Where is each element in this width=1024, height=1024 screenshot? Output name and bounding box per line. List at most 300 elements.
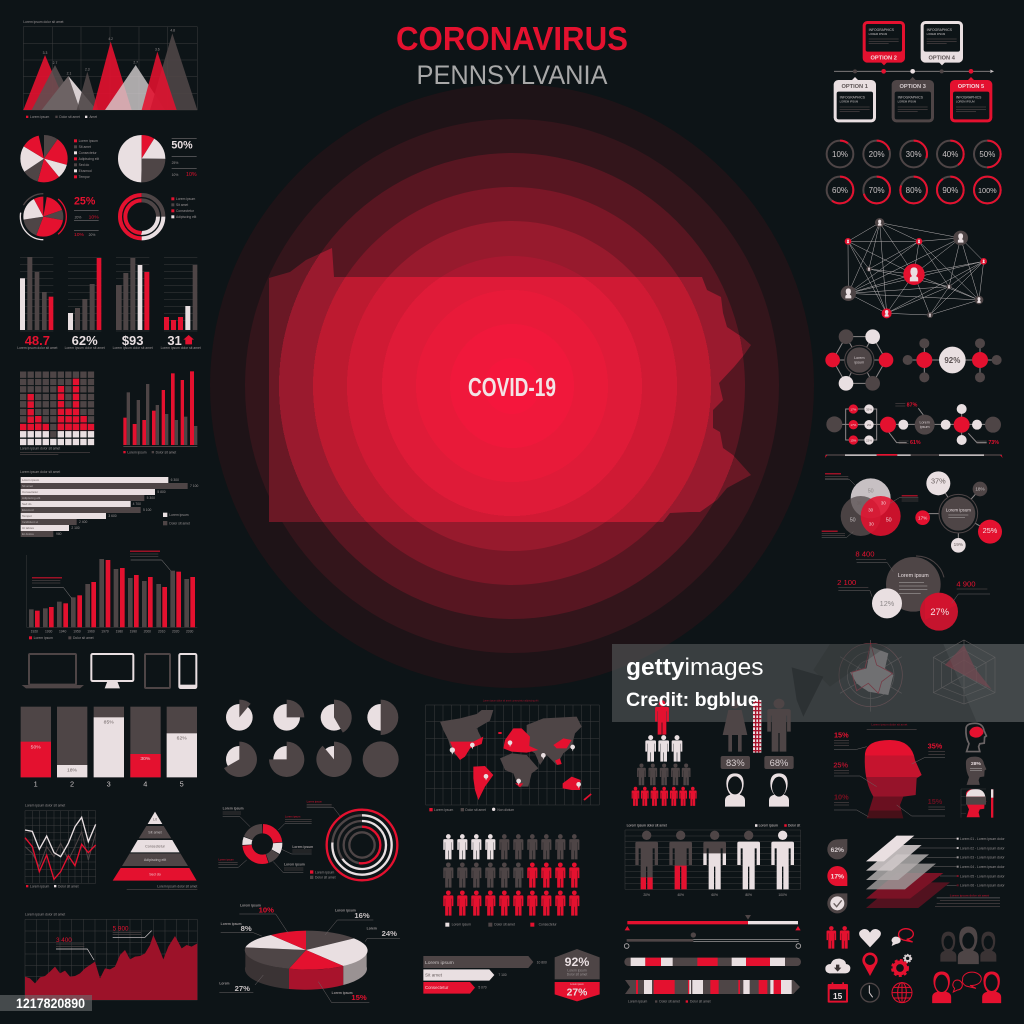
pie 1 legend: Sit amet bbox=[79, 145, 91, 149]
grouped column chart: Lorem ipsum bbox=[127, 450, 147, 454]
percentage rings bbox=[827, 141, 1001, 203]
triangle chart: 2.7 bbox=[133, 61, 138, 65]
percentage rings: 40% bbox=[942, 150, 958, 159]
hexagon badge 92%: Lorem ipsum bbox=[570, 983, 584, 986]
radar chart 1 bbox=[839, 640, 902, 712]
bubble hub chart bbox=[915, 471, 1002, 553]
triangle chart: Lorem ipsum dolor sit amet bbox=[23, 20, 64, 24]
percentage rings: 30% bbox=[906, 150, 922, 159]
3D pie chart: 16% bbox=[354, 911, 370, 920]
icon: chat bubbles bbox=[892, 929, 913, 946]
bubble hub chart: 37% bbox=[931, 477, 946, 486]
head profile chart: 15% bbox=[834, 731, 849, 740]
horizontal bar chart: Dolor sit amet bbox=[169, 521, 190, 525]
ring legend bbox=[171, 197, 196, 219]
Venn diagram bbox=[822, 473, 918, 537]
horizontal bar chart: 2 100 bbox=[71, 526, 80, 530]
option 3 card: OPTION 3 bbox=[899, 84, 926, 90]
process tree: ipsum bbox=[920, 425, 930, 429]
concentric progress chart: Lorem ipsum bbox=[307, 799, 323, 803]
paired column chart: 2020 bbox=[172, 629, 180, 633]
arrow bars bbox=[423, 956, 547, 994]
donut chart with callouts: Lorem ipsum bbox=[223, 807, 244, 811]
donut chart with callouts: Lorem ipsum bbox=[284, 863, 305, 867]
network diagram bbox=[841, 218, 987, 318]
rounded segmented bar bbox=[624, 958, 801, 966]
small pie grid bbox=[224, 700, 399, 777]
right column upper elements bbox=[827, 21, 1001, 318]
head profile chart: 15% bbox=[928, 797, 943, 806]
Venn diagram: 30 bbox=[857, 501, 862, 506]
heat grid: Lorem ipsum dolor sit amet bbox=[20, 447, 60, 451]
triangle chart: 3.3 bbox=[43, 51, 47, 55]
process tree: 15% bbox=[850, 438, 857, 442]
option timeline bbox=[834, 69, 994, 74]
figure percentage chart: Lorem ipsum bbox=[759, 823, 778, 827]
bar set 31 up: Lorem ipsum dolor sit amet bbox=[161, 346, 201, 350]
3D pie chart bbox=[219, 904, 400, 1003]
option 2 card: LOREM IPSUM bbox=[869, 32, 887, 36]
paired column chart: 2000 bbox=[144, 629, 151, 633]
horizontal bar chart: 4 700 bbox=[133, 502, 141, 506]
triangle chart: Lorem ipsum bbox=[30, 115, 49, 119]
triangle chart: 2.7 bbox=[53, 61, 57, 65]
process tree: 17% bbox=[850, 407, 857, 411]
bubble hub chart: 19% bbox=[954, 542, 963, 547]
concentric progress chart: Dolor sit amet bbox=[315, 876, 336, 880]
icon: conversation bbox=[932, 971, 1001, 1003]
head profile chart: Lorem ipsum dolor sit amet bbox=[871, 722, 907, 726]
stacked percentage columns: 30% bbox=[140, 756, 151, 762]
donut chart with callouts: Lorem ipsum bbox=[285, 814, 301, 818]
stat 50%: 50% bbox=[171, 140, 193, 152]
world map: Lorem ipsum dolor sit amet consectetur adipiscing elit bbox=[483, 700, 539, 703]
bubble hub chart: 17% bbox=[918, 515, 927, 520]
stat 25%: 20% bbox=[89, 233, 95, 237]
stacked percentage columns: 62% bbox=[177, 736, 187, 742]
Venn diagram: 30 bbox=[881, 501, 886, 506]
left column upper charts bbox=[17, 20, 201, 350]
paired column chart: 1960 bbox=[87, 629, 95, 633]
pyramid chart: Adipiscing elit bbox=[144, 858, 166, 862]
figure percentage chart: Lorem ipsum dolor sit amet bbox=[627, 823, 667, 827]
overlapping bubble chart: 4 900 bbox=[956, 580, 976, 589]
pie 1 legend: Consectetur bbox=[79, 151, 98, 155]
exploded pie chart bbox=[20, 194, 66, 240]
stacked percentage columns: 3 bbox=[107, 779, 111, 788]
drop badges: 62% bbox=[831, 847, 844, 854]
stacked percentage columns: 18% bbox=[67, 767, 78, 773]
grey slider bbox=[624, 932, 801, 948]
bar set 62%: Lorem ipsum dolor sit amet bbox=[65, 346, 105, 350]
bar set 31 up bbox=[161, 257, 201, 350]
option 1 card bbox=[834, 77, 876, 122]
figure percentage chart: 20% bbox=[643, 893, 650, 897]
paired column chart: Dolor sit amet bbox=[73, 636, 94, 640]
icon: location pin bbox=[862, 953, 878, 976]
3D pie chart: 24% bbox=[382, 929, 397, 938]
stat 50%: 10% bbox=[172, 173, 178, 177]
triangle chart: 2.3 bbox=[85, 68, 90, 72]
area chart: Lorem ipsum dolor sit amet bbox=[25, 913, 65, 917]
icon: laptop bbox=[22, 654, 84, 688]
paired column chart: Lorem ipsum bbox=[34, 636, 53, 640]
horizontal bar chart: 980 bbox=[56, 532, 62, 536]
donut chart with callouts: Lorem ipsum bbox=[292, 845, 313, 849]
grouped column chart bbox=[123, 371, 197, 454]
area chart: 3 400 bbox=[56, 937, 72, 944]
gender comparison: 83% bbox=[726, 758, 745, 768]
concentric outbreak rings bbox=[210, 84, 814, 688]
icon: head with percentage: 28% bbox=[971, 761, 982, 767]
stacked layers diagram bbox=[866, 836, 1005, 908]
stat 25% bbox=[74, 196, 99, 238]
concentric progress chart bbox=[307, 799, 397, 880]
bar set 62% bbox=[65, 257, 105, 350]
ring legend: Lorem ipsum bbox=[176, 197, 195, 201]
option 3 card bbox=[892, 77, 934, 122]
hexagon badge 92%: Lorem ipsum bbox=[567, 968, 587, 972]
arrow bars: 5 070 bbox=[478, 986, 487, 990]
percentage rings: 70% bbox=[869, 186, 885, 195]
area chart: 5 900 bbox=[113, 925, 129, 932]
3D pie chart: 15% bbox=[351, 993, 367, 1002]
horizontal bar chart: Tempor bbox=[22, 514, 32, 518]
stacked layers diagram: Lorem 05 - Lorem ipsum dolor bbox=[960, 874, 1005, 878]
option 4 card: INFOGRAPHICS bbox=[927, 28, 953, 32]
map of Pennsylvania bbox=[269, 248, 751, 522]
horizontal bar chart: Eiusmod bbox=[22, 508, 34, 512]
stacked layers diagram: Lorem 06 - Lorem ipsum dolor bbox=[960, 884, 1005, 888]
option 1 card: LOREM IPSUM bbox=[840, 100, 858, 104]
paired column chart bbox=[27, 551, 197, 640]
triangle chart: 4.2 bbox=[108, 37, 113, 41]
horizontal bar chart: 3 600 bbox=[108, 514, 117, 518]
pyramid chart: Lorem ipsum dolor sit amet bbox=[157, 884, 197, 888]
horizontal bar chart: 7 100 bbox=[190, 484, 198, 488]
line chart: Lorem ipsum bbox=[30, 884, 49, 888]
arrow bars: Lorem ipsum bbox=[425, 960, 454, 966]
people pictogram: Dolor sit amet bbox=[494, 923, 515, 927]
figure percentage chart bbox=[625, 823, 801, 897]
option 5 card: LOREM IPSUM bbox=[956, 100, 975, 104]
double ring chart bbox=[120, 195, 163, 238]
Venn diagram: 50 bbox=[868, 489, 874, 495]
paired column chart: 2030 bbox=[186, 629, 194, 633]
paired column chart: 1920 bbox=[31, 629, 38, 633]
paired column chart: 2010 bbox=[158, 629, 166, 633]
right column middle elements bbox=[822, 329, 1003, 631]
pie chart 2 bbox=[130, 147, 153, 170]
pie 1 legend: Sed do bbox=[79, 163, 89, 167]
watermark credit text: Credit: bgblue bbox=[626, 689, 759, 711]
percentage rings: 80% bbox=[906, 186, 922, 195]
horizontal bar chart: 2 400 bbox=[79, 520, 87, 524]
overlapping bubble chart: Lorem ipsum bbox=[898, 573, 929, 579]
figure percentage chart: 60% bbox=[711, 893, 718, 897]
overlapping bubble chart: 12% bbox=[880, 599, 895, 608]
process tree: 2% bbox=[867, 423, 871, 427]
hexagon badge 92%: 27% bbox=[567, 987, 587, 998]
red slider bbox=[625, 915, 801, 930]
bar set $93 bbox=[113, 257, 153, 350]
3D pie chart: 10% bbox=[259, 906, 274, 915]
lower right section bbox=[612, 640, 1024, 828]
COVID-19 label: COVID-19 bbox=[468, 372, 556, 402]
icon: head thermometer bbox=[961, 789, 993, 818]
option 2 card bbox=[863, 21, 905, 65]
horizontal bar chart: Consectetur bbox=[22, 490, 38, 494]
icon: clock bbox=[861, 983, 879, 1002]
arrow bars: 7 100 bbox=[498, 973, 507, 977]
line chart: Lorem ipsum dolor sit amet bbox=[25, 804, 65, 808]
option 1 card: INFOGRAPHICS bbox=[840, 96, 866, 100]
stacked layers diagram: Lorem 02 - Lorem ipsum dolor bbox=[960, 846, 1005, 850]
process tree: 22% bbox=[866, 438, 872, 442]
figure percentage chart: 80% bbox=[745, 893, 752, 897]
option 4 card: OPTION 4 bbox=[928, 56, 956, 62]
stat 25%: 20% bbox=[75, 215, 81, 219]
icon: tablet bbox=[145, 654, 170, 688]
stacked percentage columns bbox=[21, 707, 197, 788]
triangle chart: 4.8 bbox=[170, 29, 175, 33]
drop badges: 17% bbox=[831, 873, 844, 880]
triangle chart bbox=[23, 20, 197, 119]
paired column chart: 1990 bbox=[130, 629, 137, 633]
figure percentage chart: Dolor sit bbox=[788, 823, 800, 827]
image id strip: 1217820890 bbox=[16, 995, 85, 1011]
people pyramid: Dolor sit bbox=[788, 823, 800, 827]
donut chart with callouts: Lorem ipsum bbox=[218, 857, 234, 861]
icon: globe bbox=[892, 983, 912, 1003]
stacked percentage columns: 85% bbox=[104, 719, 114, 725]
percentage rings: 20% bbox=[869, 150, 885, 159]
people pyramid: Lorem ipsum bbox=[759, 823, 778, 827]
option 2 card: OPTION 2 bbox=[870, 56, 897, 62]
world map: Dolor sit amet bbox=[465, 808, 486, 812]
pie 1 legend: Adipiscing elit bbox=[79, 157, 99, 161]
pie 1 legend: Tempor bbox=[79, 175, 91, 179]
option 3 card: LOREM IPSUM bbox=[898, 100, 916, 104]
overlapping bubble chart: 2 100 bbox=[837, 578, 856, 587]
icon: monitor bbox=[91, 654, 133, 688]
stacked percentage columns: 5 bbox=[180, 779, 184, 788]
overlapping bubble chart: 27% bbox=[930, 607, 949, 617]
option 3 card: INFOGRAPHICS bbox=[898, 96, 924, 100]
pie 1 legend bbox=[74, 139, 99, 179]
process tree: 17% bbox=[850, 423, 857, 427]
option 1 card: OPTION 1 bbox=[841, 84, 868, 90]
people pictogram: Consectetur bbox=[539, 923, 557, 927]
horizontal bar chart: Lorem ipsum bbox=[169, 513, 189, 517]
triangle chart: Dolor sit amet bbox=[59, 115, 80, 119]
percentage rings: 90% bbox=[942, 186, 958, 195]
pyramid chart bbox=[113, 812, 197, 890]
arrow bars: Consectetur bbox=[425, 985, 449, 990]
head profile chart bbox=[833, 722, 945, 818]
stat 25%: 10% bbox=[89, 214, 99, 220]
paired column chart: 1950 bbox=[73, 629, 81, 633]
ring legend: Sit amet bbox=[176, 203, 188, 207]
figure percentage chart: 40% bbox=[677, 893, 684, 897]
icon: calendar bbox=[828, 982, 848, 1003]
donut chart with callouts bbox=[218, 807, 313, 873]
area chart bbox=[25, 913, 197, 1000]
pyramid chart: Sed do bbox=[149, 872, 161, 876]
grouped column chart: Dolor sit amet bbox=[156, 450, 176, 454]
bottom center charts bbox=[218, 700, 600, 1003]
world map: Lorem ipsum bbox=[434, 808, 453, 812]
3D pie chart: Lorem bbox=[367, 927, 377, 931]
Getty Images watermark band bbox=[612, 644, 1024, 722]
Venn diagram: 30 bbox=[869, 522, 874, 527]
head profile chart: 25% bbox=[833, 760, 848, 769]
option 5 card bbox=[950, 77, 992, 122]
stacked percentage columns: 2 bbox=[70, 779, 74, 788]
pyramid chart: Lit bbox=[153, 817, 157, 821]
lower right charts and icons bbox=[624, 823, 1005, 1003]
overlapping bubble chart bbox=[837, 550, 990, 631]
people pictogram bbox=[443, 834, 579, 927]
watermark logo text: gettyimages bbox=[626, 654, 764, 681]
overlapping bubble chart: 8 400 bbox=[855, 550, 875, 559]
bubble hub chart: Lorem ipsum bbox=[946, 507, 971, 512]
option 4 card bbox=[921, 21, 963, 65]
triangle chart: 2.1 bbox=[67, 72, 71, 76]
triangle chart: 3.6 bbox=[155, 47, 160, 51]
process tree: 73% bbox=[988, 440, 999, 446]
bubble hub chart: 25% bbox=[983, 526, 998, 535]
icon: calendar: 15 bbox=[833, 991, 843, 1001]
horizontal bar chart: Lorem ipsum dolor sit amet bbox=[20, 470, 60, 474]
paired column chart: 1980 bbox=[116, 629, 123, 633]
left column lower charts bbox=[21, 707, 197, 1000]
gender comparison: 68% bbox=[770, 758, 788, 768]
hexagon badge 92%: 92% bbox=[565, 955, 589, 969]
pie 1 legend: Eiusmod bbox=[79, 169, 92, 173]
arrow bars: 10 800 bbox=[537, 960, 547, 964]
bubble hub chart: 18% bbox=[975, 487, 985, 492]
pyramid chart: Consectetur bbox=[145, 844, 166, 848]
icon: head with brain bbox=[966, 723, 986, 752]
horizontal bar chart: Adipiscing elit bbox=[22, 496, 40, 500]
stacked layers diagram: Lorem ipsum dolor sit amet bbox=[950, 893, 989, 897]
paired column chart: 1970 bbox=[101, 629, 109, 633]
3D pie chart: Lorem bbox=[219, 982, 230, 986]
icon: gears bbox=[892, 954, 912, 976]
paired column chart: 1930 bbox=[45, 629, 53, 633]
concentric progress chart: Lorem ipsum bbox=[315, 870, 334, 874]
triangle chart: Amet bbox=[89, 115, 97, 119]
horizontal bar chart: 5 100 bbox=[143, 508, 151, 512]
3D pie chart: Lorem ipsum bbox=[240, 904, 261, 908]
bar set 62%: 62% bbox=[72, 333, 98, 348]
horizontal bar chart: 6 300 bbox=[171, 478, 179, 482]
3D pie chart: 27% bbox=[235, 984, 250, 993]
horizontal bar chart: 5 300 bbox=[147, 496, 155, 500]
hexagon badge 92% bbox=[555, 949, 600, 1001]
bar set 48.7 bbox=[17, 257, 57, 350]
horizontal bar chart: Et dolore bbox=[22, 532, 34, 536]
head profile chart: 10% bbox=[834, 792, 849, 801]
option 4 card: LOREM IPSUM bbox=[927, 32, 945, 36]
stacked percentage columns: 50% bbox=[31, 744, 41, 750]
hexagon node graph bbox=[825, 329, 893, 391]
ring legend: Adipiscing elit bbox=[176, 215, 196, 219]
hexagon badge 92%: Dolor sit amet bbox=[567, 972, 587, 976]
stacked layers diagram: Lorem 03 - Lorem ipsum dolor bbox=[960, 856, 1005, 860]
Venn diagram: 30 bbox=[868, 507, 874, 512]
horizontal bar chart: Sit amet bbox=[22, 484, 33, 488]
3D pie chart: Lorem ipsum bbox=[221, 922, 242, 926]
icon: cloud download bbox=[825, 959, 850, 973]
bar set 48.7: 48.7 bbox=[25, 333, 50, 348]
pyramid chart: Sit amet bbox=[148, 831, 162, 835]
process tree: 87% bbox=[907, 402, 918, 408]
percentage rings: 10% bbox=[832, 150, 848, 159]
heat grid bbox=[20, 375, 95, 455]
bar set $93: $93 bbox=[122, 333, 144, 348]
world map bbox=[426, 700, 599, 812]
ribbon segmented bar bbox=[625, 980, 800, 1003]
Venn diagram: 50 bbox=[850, 517, 856, 523]
ribbon segmented bar: Dolor sit amet bbox=[690, 999, 711, 1003]
percentage rings: 100% bbox=[978, 186, 997, 195]
node graph 92% bbox=[903, 338, 1002, 382]
ribbon segmented bar: Dolor sit amet bbox=[659, 999, 680, 1003]
bar set $93: Lorem ipsum dolor sit amet bbox=[113, 346, 153, 350]
icon: group of people bbox=[940, 926, 996, 964]
Venn diagram: 50 bbox=[886, 518, 892, 524]
stacked percentage columns: 1 bbox=[34, 779, 38, 788]
line chart bbox=[25, 804, 96, 888]
process tree: 35% bbox=[866, 407, 872, 411]
stacked percentage columns: 4 bbox=[143, 779, 147, 788]
arrow bars: Sit amet bbox=[425, 973, 443, 978]
paired column chart: 1940 bbox=[59, 629, 67, 633]
ribbon segmented bar: Lorem ipsum bbox=[628, 999, 647, 1003]
bar set 48.7: Lorem ipsum dolor sit amet bbox=[17, 346, 57, 350]
process tree: Lorem bbox=[919, 421, 930, 425]
node graph 92%: 92% bbox=[944, 356, 960, 365]
subtitle: PENNSYLVANIA bbox=[416, 60, 608, 90]
line chart: Dolor sit amet bbox=[58, 884, 79, 888]
title: CORONAVIRUS bbox=[396, 20, 628, 57]
option 2 card: INFOGRAPHICS bbox=[869, 28, 895, 32]
stat 50%: 10% bbox=[186, 172, 197, 178]
people pyramid bbox=[627, 700, 800, 828]
gender comparison bbox=[721, 699, 794, 807]
option 5 card: INFOGRAPHICS bbox=[956, 96, 982, 100]
stat 25%: 10% bbox=[74, 232, 85, 238]
percentage rings: 60% bbox=[832, 186, 848, 195]
stacked layers diagram: Lorem 04 - Lorem ipsum dolor bbox=[960, 865, 1005, 869]
timeline bar bbox=[825, 454, 1003, 458]
icon: phone bbox=[179, 654, 196, 688]
icon: head with percentage bbox=[966, 757, 986, 785]
figure percentage chart: 100% bbox=[778, 893, 787, 897]
horizontal bar chart: Incididunt ut bbox=[22, 520, 38, 524]
horizontal bar chart: 5 800 bbox=[157, 490, 166, 494]
horizontal bar chart bbox=[20, 470, 198, 537]
option 5 card: OPTION 5 bbox=[958, 84, 984, 90]
pie chart 1 bbox=[32, 147, 56, 170]
horizontal bar chart: Sed do bbox=[22, 502, 32, 506]
icon: heart bbox=[859, 929, 881, 947]
stat 50% bbox=[171, 138, 197, 178]
world map: Non dictum bbox=[497, 808, 514, 812]
ring legend: Consectetur bbox=[176, 209, 195, 213]
